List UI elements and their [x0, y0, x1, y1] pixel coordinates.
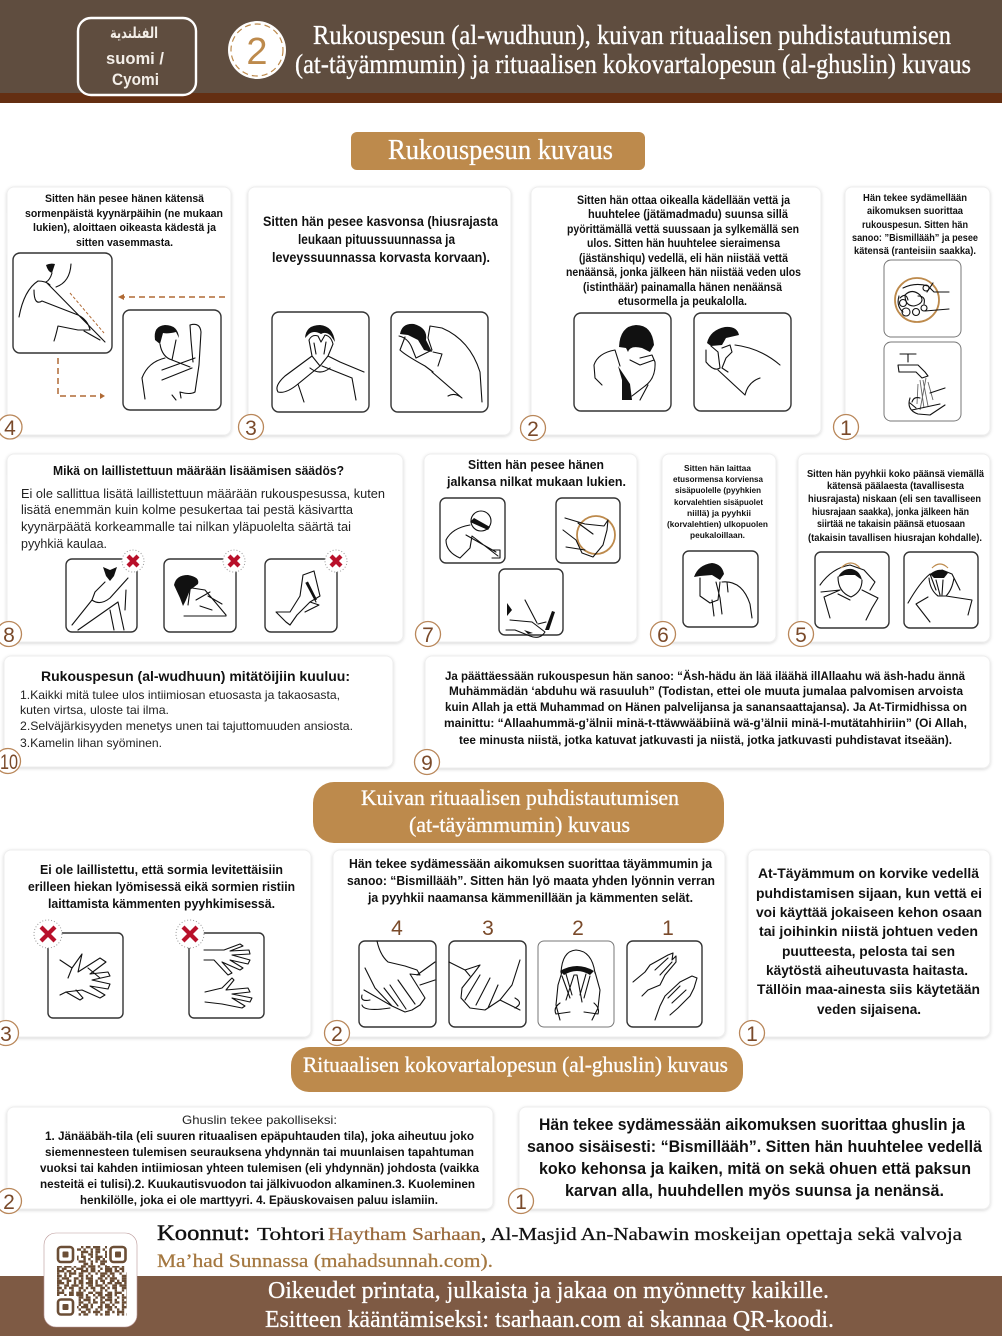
tayammum step 1 text: puhdistamisen sijaan, kun vettä ei — [756, 886, 982, 901]
step 4 text: Sitten hän pesee hänen kätensä — [45, 193, 205, 205]
ghusl step 2 text: Ghuslin tekee pakolliseksi: — [182, 1113, 337, 1127]
language badge: suomi / — [106, 49, 164, 68]
sequence digits: 4 — [391, 917, 403, 940]
ghusl step 1 text: karvan alla, huuhdellen myös suunsa ja nenänsä. — [565, 1181, 944, 1200]
step 6 text: sisäpuolelle (pyyhkien — [675, 485, 761, 495]
QR code — [44, 1233, 137, 1327]
number 2 — [324, 1020, 350, 1046]
panel: ghusl step 1 — [508, 1107, 990, 1214]
illustration: washing right arm — [13, 253, 112, 353]
credit text: Haytham Sarhaan — [328, 1224, 481, 1244]
panel: step 7 feet — [416, 454, 637, 647]
panel: step 2 mouth and nose — [520, 187, 821, 441]
number 9 — [414, 750, 440, 775]
step 3 text: leukaan pituussuunnassa ja — [298, 232, 455, 247]
step 8 text: kyynärpäätä korkeammalle tai nilkan yläpuolelta säärtä tai — [21, 520, 351, 534]
section heading: ghusl — [291, 1047, 743, 1092]
credit text — [157, 1220, 962, 1272]
step 6 text: Sitten hän laittaa — [684, 463, 751, 473]
illustration: wiping head backwards — [815, 552, 889, 628]
step 9 text: tee minusta niistä, jotka katuvat jatkuvasti ja niistä, jotka jatkuvasti puhdistavat itseään). — [459, 735, 952, 747]
tayammum step 2 text: ja pyyhkii naamansa kämmenillään ja kämmenten selät. — [367, 891, 693, 905]
number 6 — [650, 622, 676, 647]
step 7 text: Sitten hän pesee hänen — [468, 457, 604, 472]
step 3 text: leveyssuunnassa korvasta korvaan). — [272, 250, 490, 265]
number 2: 2 — [527, 418, 539, 441]
tayammum step 1 text: puutteesta, pelosta tai sen — [782, 944, 955, 959]
number 10: 10 — [0, 751, 18, 774]
panel: step 1 intention and hands — [834, 187, 990, 440]
ghusl step 1 text: Hän tekee sydämessään aikomuksen suorittaa ghuslin ja — [539, 1115, 965, 1134]
step 10 text: 3.Kamelin lihan syöminen. — [20, 736, 162, 750]
footer band: Esitteen kääntämiseksi: tsarhaan.com ai skannaa QR-koodi. — [265, 1307, 834, 1333]
number 3: 3 — [245, 417, 257, 440]
step 8 text — [21, 463, 385, 551]
sequence digits — [391, 917, 674, 940]
step 8 text: Ei ole sallittua lisätä laillistettuun määrään rukouspesussa, kuten — [21, 487, 385, 501]
step 2 text — [566, 195, 801, 308]
tayammum step 2 text: Hän tekee sydämessään aikomuksen suorittaa täyämmumin ja — [349, 857, 713, 871]
step 9 text: mainittu: “Allaahummä-g’älnii minä-t-ttäwwääbiinä wä-g’älnii minä-l-mutätahhiriin” (Oi Allah, — [444, 718, 967, 730]
step 2 text: (istinthäär) painamalla hänen nenäänsä — [583, 282, 783, 294]
illustration: bending to feet — [440, 498, 505, 563]
number 1: 1 — [515, 1191, 527, 1214]
step 6 text — [667, 463, 768, 540]
illustration: wiping face with both hands — [538, 941, 614, 1027]
illustration: washing face front — [272, 312, 369, 412]
panel: tayammum step 2 — [324, 850, 725, 1046]
illustration: washing ankle — [499, 569, 563, 637]
section heading: tayammum: (at-täyämmumin) kuvaus — [409, 812, 630, 837]
step 1 text: sanoo: ”Bismillääh” ja pesee — [852, 232, 978, 244]
step 8 text: lisätä enemmän kuin kolme pesukertaa tai pestä käsivartta — [21, 503, 353, 517]
step 5 text: (takaisin tavallisen hiusrajan kohdalle). — [808, 532, 982, 544]
ghusl step 2 text: nesteitä ei tulisi).2. Kuukautisvuodon tai jälkivuodon alkaminen.3. Kuoleminen — [40, 1179, 475, 1191]
number 7 — [416, 622, 440, 647]
number 8 — [0, 622, 22, 647]
panel: step 9 closing supplication — [414, 656, 990, 775]
number 7: 7 — [422, 624, 434, 647]
panel: tayammum step 1 — [740, 850, 990, 1046]
step 7 text: jalkansa nilkat mukaan lukien. — [446, 474, 626, 489]
illustration: wiping back of left hand — [449, 941, 526, 1027]
step 1 text: Hän tekee sydämellään — [863, 192, 967, 204]
number badge 2 — [228, 21, 286, 79]
header band — [0, 0, 1002, 103]
number 2 — [520, 416, 546, 441]
credit text: , Al-Masjid An-Nabawin moskeijan opettaja sekä valvoja — [481, 1224, 962, 1244]
credit text: Tohtori — [257, 1224, 325, 1244]
illustration: foot detail — [556, 498, 620, 563]
illustration: interlaced fingers, crossed out — [34, 920, 123, 1018]
step 3 text: Sitten hän pesee kasvonsa (hiusrajasta — [263, 214, 498, 229]
number 1 — [834, 414, 858, 440]
step 6 text: peukaloillaan. — [690, 530, 745, 540]
number 4: 4 — [4, 417, 16, 440]
footer band: Oikeudet printata, julkaista ja jakaa on myönnetty kaikille. — [268, 1278, 829, 1304]
step 4 text: lukien), aloittaen oikeasta kädestä ja — [33, 222, 217, 234]
step 6 text: (korvalehtien) ulkopuolen — [667, 519, 768, 529]
step 5 text — [807, 468, 984, 544]
tayammum step 1 text: käytöstä aiheutuvasta haitasta. — [766, 963, 968, 978]
illustration: tap and water — [884, 342, 961, 421]
ghusl step 1 text: koko kehonsa ja kaiken, mitä on sekä ohuen että paksun — [539, 1159, 971, 1178]
panel: step 5 head — [788, 454, 990, 647]
credit text: Ma’had Sunnassa (mahadsunnah.com). — [157, 1251, 493, 1272]
ghusl step 1 text: sanoo sisäisesti: “Bismillääh”. Sitten hän huuhtelee vedellä — [527, 1137, 983, 1156]
number 6: 6 — [657, 624, 669, 647]
footer band — [0, 1276, 1002, 1336]
step 7 text — [446, 457, 626, 489]
step 9 text: Ja päättäessään rukouspesun hän sanoo: “Äsh-hädu än lää iläähä illAllaahu wä äsh-hadu ännä — [445, 670, 966, 683]
number 5 — [788, 622, 814, 647]
step 5 text: Sitten hän pyyhkii koko päänsä viemällä — [807, 468, 984, 480]
number 3 — [0, 1020, 18, 1046]
sequence digits: 1 — [662, 917, 674, 940]
title — [295, 20, 971, 79]
sequence digits: 3 — [482, 917, 494, 940]
ghusl step 2 text: 1. Jänääbäh-tila (eli suuren rituaalisen epäpuhtauden tila), joka aiheutuu joko — [45, 1131, 474, 1143]
panel: ghusl step 2 — [0, 1107, 493, 1214]
credit text: Koonnut: — [157, 1220, 250, 1245]
step 2 text: pyörittämällä vettä suussaan ja sylkemällä sen — [567, 224, 799, 236]
illustration: wiping ears — [683, 551, 758, 627]
step 10 text: kuten virtsa, uloste tai ilma. — [20, 703, 169, 717]
step 2 text: nenäänsä, jonka jälkeen hän niistää veden ulos — [566, 267, 801, 279]
ghusl step 2 text: siemennesteen tulemisen seurauksena yhdynnän tai muunlaisen tapahtuman — [45, 1147, 474, 1159]
step 1 text — [852, 192, 978, 257]
panel: tayammum step 3 — [0, 850, 311, 1046]
step 2 text: Sitten hän ottaa oikealla kädellään vettä ja — [577, 195, 791, 207]
language badge — [78, 18, 196, 95]
step 4 text — [25, 193, 223, 249]
step 9 text: Muhämmädän ‘abduhu wä rasuuluh” (Todistan, ettei ole muuta jumalaa palvomisen arvoista — [449, 686, 964, 698]
panel: step 10 nullifiers — [0, 656, 393, 774]
title: Rukouspesun (al-wudhuun), kuivan rituaalisen puhdistautumisen — [313, 20, 951, 50]
step 4 text: sitten vasemmasta. — [76, 237, 173, 249]
illustration: washing face side — [391, 312, 488, 412]
panel: step 3 face — [238, 187, 511, 440]
number badge 2: 2 — [246, 31, 268, 73]
number 9: 9 — [421, 752, 433, 775]
tayammum step 1 text: tai joihinkin niistä johtuen veden — [759, 924, 978, 939]
step 4 text: sormenpäistä kyynärpäihin (ne mukaan — [25, 208, 223, 220]
step 5 text: hiusrajaan saakka), jonka jälkeen hän — [812, 506, 969, 518]
step 3 text — [263, 214, 498, 265]
number 1 — [740, 1020, 764, 1046]
illustration: arm above elbow, crossed out — [66, 550, 144, 632]
illustration: rinsing mouth — [574, 313, 671, 411]
step 8 text: Mikä on laillistettuun määrään lisäämisen säädös? — [53, 463, 344, 478]
step 9 text — [444, 670, 967, 747]
step 8 text: pyyhkiä kaulaa. — [21, 537, 107, 551]
step 5 text: siirtää ne takaisin päänsä etuosaan — [817, 518, 965, 530]
illustration: wiping back of right hand — [359, 941, 436, 1027]
step 1 text: kätensä (ranteisiin saakka). — [854, 245, 976, 257]
panel: step 4 arms — [0, 187, 231, 440]
illustration: wiping head forwards — [904, 552, 978, 628]
ghusl step 2 text: vuoksi tai kahden intiimiosan yhteen tulemisen (eli yhdynnän) johdosta (vaikka — [40, 1163, 480, 1175]
panel: step 8 exceeding the limit — [0, 454, 403, 647]
number 5: 5 — [795, 624, 807, 647]
number 2: 2 — [3, 1191, 15, 1214]
language badge: الفنلندية — [110, 24, 158, 42]
sequence digits: 2 — [572, 917, 584, 940]
illustration: rubbing hands — [884, 260, 961, 337]
illustration: rinsing nose — [694, 313, 791, 411]
section heading: ghusl: Rituaalisen kokovartalopesun (al-ghuslin) kuvaus — [303, 1052, 728, 1077]
illustration: washing left arm — [123, 310, 221, 410]
step 2 text: ulos. Sitten hän huuhtelee sieraimensa — [587, 238, 781, 250]
step 6 text: etusormensa korviensa — [673, 474, 763, 484]
step 1 text: aikomuksen suorittaa — [867, 205, 963, 217]
tayammum step 3 text: erilleen hiekan lyömisessä eikä sormien ristiin — [28, 879, 295, 894]
number 2 — [0, 1188, 22, 1214]
illustration: neck wiping, crossed out — [164, 550, 245, 632]
number 3: 3 — [0, 1023, 12, 1046]
section heading: wudhu: Rukouspesun kuvaus — [388, 135, 613, 166]
number 8: 8 — [3, 624, 15, 647]
ghusl step 1 text — [527, 1115, 983, 1200]
tayammum step 1 text: At-Täyämmum on korvike vedellä — [758, 866, 980, 881]
illustration: palms struck — [627, 941, 702, 1027]
tayammum step 1 text: voi käyttää jokaiseen kehon osaan — [756, 905, 982, 920]
tayammum step 1 text — [756, 866, 982, 1017]
step 6 text: korvalehtien sisäpuolet — [674, 497, 763, 507]
step 5 text: kätensä päälaesta (tavallisesta — [827, 480, 964, 492]
tayammum step 2 text: sanoo: “Bismillääh”. Sitten hän lyö maata yhden lyönnin verran — [347, 874, 715, 888]
panel: step 6 ears — [650, 454, 776, 647]
step 10 text — [20, 669, 353, 750]
section heading: tayammum: Kuivan rituaalisen puhdistautumisen — [361, 785, 679, 810]
number 2: 2 — [331, 1023, 343, 1046]
number 1 — [508, 1188, 534, 1214]
ghusl step 2 text — [40, 1113, 480, 1207]
number 1: 1 — [840, 417, 852, 440]
ghusl step 2 text: henkilölle, joka ei ole marttyyri. 4. Epäuskovaisen paluu islamiin. — [80, 1195, 438, 1207]
section heading: tayammum — [313, 782, 724, 843]
step 2 text: (jästänshiqu) vedellä, eli hän niistää vettä — [579, 253, 789, 265]
tayammum step 1 text: Tällöin maa-ainesta siis käytetään — [757, 982, 980, 997]
tayammum step 3 text — [28, 862, 295, 911]
step 2 text: etusormella ja peukalolla. — [618, 296, 747, 308]
step 1 text: rukouspesun. Sitten hän — [862, 219, 968, 231]
arrows between illustrations — [58, 294, 225, 399]
step 2 text: huuhtelee (jätämadmadu) suunsa sillä — [588, 209, 789, 221]
step 6 text: niillä) ja pyyhkii — [687, 508, 751, 518]
step 10 text: Rukouspesun (al-wudhuun) mitätöijiin kuuluu: — [41, 669, 350, 684]
section heading: wudhu — [351, 132, 645, 170]
illustration: shin washing, crossed out — [265, 550, 347, 632]
step 9 text: kuin Allah ja että Muhammad on Hänen palvelijansa ja sanansaattajansa). Ja At-Tirmidhissa on — [445, 702, 967, 714]
illustration: spread fingers, crossed out — [176, 920, 264, 1018]
tayammum step 3 text: laittamista kämmenten pyyhkimisessä. — [48, 896, 275, 911]
step 5 text: hiusrajasta) niskaan (eli sen tavalliseen — [808, 493, 981, 505]
language badge: Cyomi — [112, 70, 159, 89]
tayammum step 2 text — [347, 857, 715, 905]
tayammum step 1 text: veden sijaisena. — [817, 1002, 921, 1017]
number 1: 1 — [746, 1023, 758, 1046]
tayammum step 3 text: Ei ole laillistettu, että sormia levitettäisiin — [40, 862, 283, 877]
step 10 text: 1.Kaikki mitä tulee ulos intiimiosan etuosasta ja takaosasta, — [20, 688, 340, 702]
number 4 — [0, 415, 22, 440]
number 3 — [238, 414, 264, 440]
step 10 text: 2.Selväjärkisyyden menetys unen tai tajuttomuuden ansiosta. — [20, 719, 353, 733]
